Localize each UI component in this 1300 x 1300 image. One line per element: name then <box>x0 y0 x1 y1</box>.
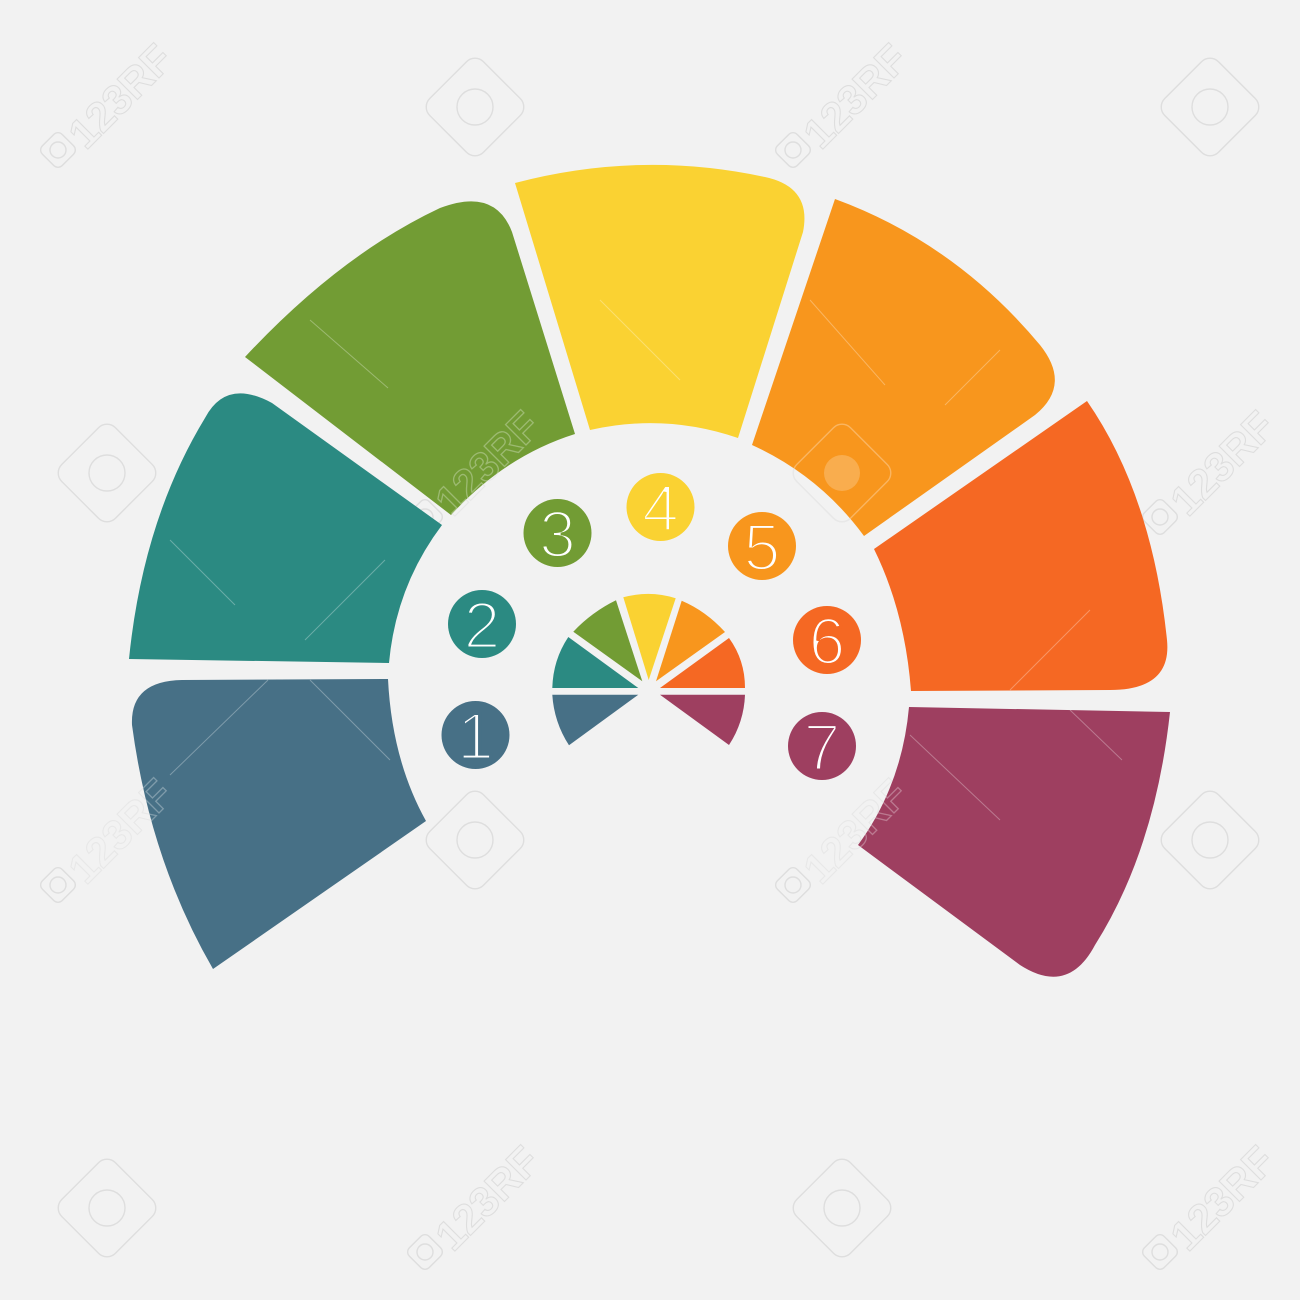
watermark: repeated 123RF logos: 123RF <box>1161 402 1284 524</box>
badge 7 <box>788 710 856 784</box>
badge 4: 4 <box>642 471 679 545</box>
badge 7: 7 <box>804 710 840 784</box>
watermark overlay on coloured segments: 123RF <box>426 402 549 524</box>
watermark: repeated 123RF logos: 123RF <box>426 402 549 524</box>
badge 5 <box>728 510 796 584</box>
badge 6 <box>793 604 861 678</box>
watermark: repeated 123RF logos: 123RF <box>59 770 182 892</box>
badge 2 <box>448 588 516 662</box>
watermark: repeated 123RF logos: 123RF <box>794 770 917 892</box>
segment 3: green <box>245 201 575 515</box>
segment 7: plum <box>858 707 1170 977</box>
badge 5: 5 <box>744 510 780 584</box>
watermark: repeated 123RF logos: 123RF <box>59 35 182 157</box>
segment 5: orange <box>752 199 1055 536</box>
watermark diagonal lines <box>170 300 1122 820</box>
watermark: repeated 123RF logos: 123RF <box>426 1137 549 1259</box>
segment 2: teal <box>129 393 442 663</box>
watermark: repeated 123RF logos: 123RF <box>1161 1137 1284 1259</box>
badge 1: 1 <box>457 699 494 773</box>
mini pie chart <box>552 594 745 745</box>
badge 6: 6 <box>809 604 845 678</box>
watermark overlay on coloured segments: 123RF <box>59 770 182 892</box>
badge 1 <box>442 699 510 773</box>
badge 3 <box>524 497 592 571</box>
watermark overlay on coloured segments: 123RF <box>794 770 917 892</box>
segment 4: yellow <box>515 165 804 438</box>
watermark overlay on coloured segments <box>59 402 917 892</box>
badge 3: 3 <box>539 497 576 571</box>
segment 6: red-orange <box>874 401 1167 691</box>
segment 1: blue <box>132 679 426 969</box>
watermark: repeated 123RF logos: 123RF <box>794 35 917 157</box>
badge 4 <box>626 471 694 545</box>
badge 2: 2 <box>464 588 500 662</box>
